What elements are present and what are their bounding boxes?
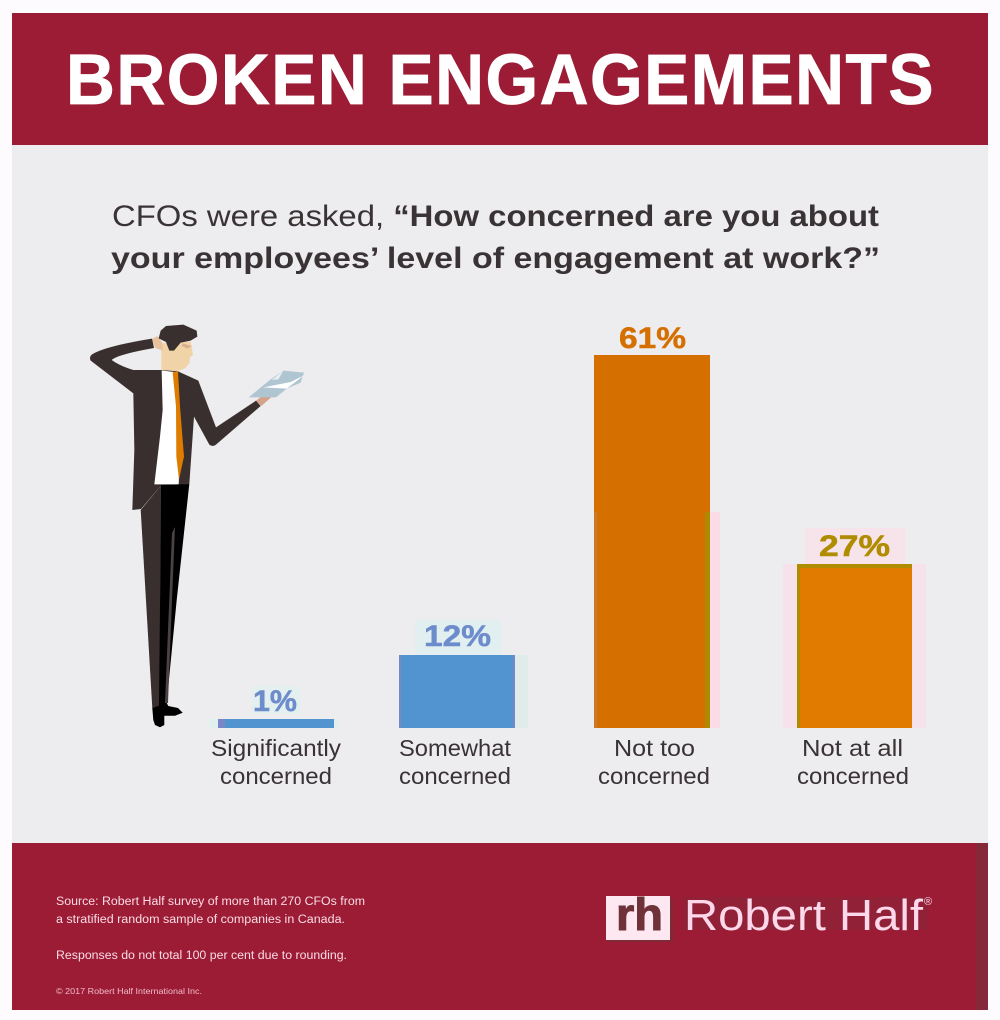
question text xyxy=(111,200,880,275)
bar: somewhat concerned 12% xyxy=(399,620,528,728)
category labels: Not at all xyxy=(802,735,903,761)
logo: Robert Half xyxy=(606,889,932,942)
bar: not at all concerned 27%: 27% xyxy=(819,530,890,563)
category labels: concerned xyxy=(598,763,710,789)
category labels: Somewhat xyxy=(399,735,512,761)
logo: Robert Half: Robert Half xyxy=(684,891,924,940)
panel: footer xyxy=(12,843,988,1010)
question text: your employees’ level of engagement at work?” xyxy=(111,242,880,275)
category labels: Significantly xyxy=(211,735,342,761)
upper body xyxy=(90,325,304,510)
copyright: © 2017 Robert Half International Inc. xyxy=(56,986,202,996)
bar chart xyxy=(209,322,926,728)
title: BROKEN ENGAGEMENTS xyxy=(66,39,935,119)
source note: Responses do not total 100 per cent due to rounding. xyxy=(56,950,347,962)
category labels: concerned xyxy=(797,763,909,789)
source note: Source: Robert Half survey of more than 270 CFOs from xyxy=(56,896,365,908)
panel: background xyxy=(12,145,988,843)
category labels: concerned xyxy=(220,763,332,789)
logo: Robert Half: ® xyxy=(924,896,932,908)
logo: Robert Half: rh xyxy=(616,889,663,940)
category labels: concerned xyxy=(399,763,511,789)
bar: somewhat concerned 12%: 12% xyxy=(424,620,491,653)
category labels: Not too xyxy=(614,735,695,761)
bar: significantly concerned 1%: 1% xyxy=(253,685,297,718)
source note: a stratified random sample of companies in Canada. xyxy=(56,914,345,926)
source note xyxy=(56,896,365,962)
question text: CFOs were asked, “How concerned are you about xyxy=(112,200,879,233)
bar: not too concerned 61% xyxy=(594,322,720,728)
legs and shoes xyxy=(141,484,189,727)
bar: not at all concerned 27% xyxy=(783,528,926,728)
category labels xyxy=(211,735,909,789)
bar: not too concerned 61%: 61% xyxy=(619,322,686,355)
bar: significantly concerned 1% xyxy=(209,685,337,728)
illustration: businessman reading a paper xyxy=(90,325,304,727)
panel: header banner xyxy=(12,13,988,145)
